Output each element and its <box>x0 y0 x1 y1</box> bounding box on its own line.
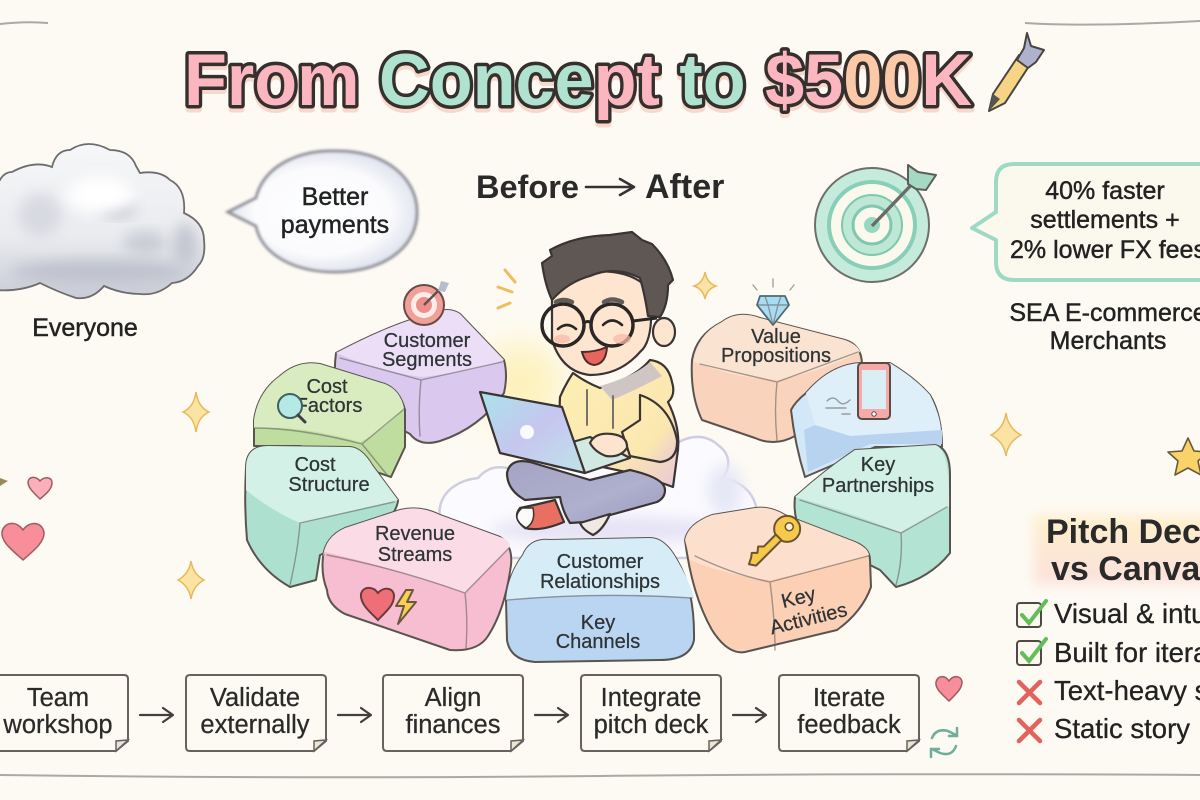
character: boy with laptop on cloud cushion <box>480 232 678 535</box>
glasses <box>542 304 584 346</box>
hair <box>542 232 673 317</box>
step: Validate externally <box>186 675 326 751</box>
step: Align finances <box>383 675 523 751</box>
block: Customer Relationships and Key Channels: Channels <box>556 631 640 653</box>
business model canvas blocks <box>245 279 950 662</box>
arrow <box>733 708 766 722</box>
callout: 40% faster settlements: 40% faster <box>1045 177 1165 205</box>
block: Customer Segments: Customer <box>384 330 471 352</box>
block: Customer Relationships and Key Channels: Relationships <box>540 571 660 593</box>
icon: gold key <box>741 510 806 575</box>
icon: target with dart <box>815 165 936 282</box>
block: Customer Relationships and Key Channels: Customer <box>557 551 644 573</box>
block: Value Propositions: Propositions <box>721 345 831 367</box>
shoe left <box>517 500 564 529</box>
block: Key Partnerships: Partnerships <box>822 475 934 497</box>
star <box>1168 438 1200 475</box>
block: Cost Structure: Cost <box>294 454 336 476</box>
heading: Before to After: Before <box>476 169 579 205</box>
hoodie strings <box>587 390 613 428</box>
panel: Pitch Deck vs Canvas <box>1017 513 1200 744</box>
eyes <box>558 320 622 329</box>
cheeks <box>554 334 570 344</box>
icon: heart <box>936 677 962 701</box>
block: Cost Structure: Structure <box>288 474 370 496</box>
decorative sparkles and hearts <box>0 272 1200 599</box>
glow behind laptop <box>478 343 562 427</box>
step: Integrate pitch deck: pitch deck <box>594 711 709 739</box>
block: Key Activities: Activities <box>768 599 849 639</box>
icon: magnifier <box>278 394 305 422</box>
block: Customer Segments <box>335 310 506 443</box>
heading: Before to After <box>476 168 724 206</box>
cushion cloud <box>439 437 757 558</box>
mouth <box>582 347 607 365</box>
block: phone <box>791 363 942 477</box>
step: Iterate feedback <box>779 675 919 751</box>
step: Team workshop: workshop <box>2 711 113 739</box>
sparkle <box>991 413 1021 456</box>
icon: small target on Customer Segments <box>404 281 449 325</box>
icon: diamond <box>753 279 794 325</box>
heart <box>28 477 52 499</box>
icon: heart and lightning bolt <box>361 588 416 624</box>
speech bubble: Better payments: Better <box>302 183 368 211</box>
icon: grey cloud <box>0 144 204 298</box>
step: Team workshop: Team <box>27 684 89 712</box>
block: Customer Segments: Segments <box>382 349 472 371</box>
cross item: Static story <box>1054 713 1190 744</box>
process flow <box>0 675 962 757</box>
sparkle <box>694 272 716 299</box>
block: Revenue Streams: Streams <box>378 544 452 566</box>
block: Revenue Streams <box>322 508 511 650</box>
hood lining <box>600 362 662 400</box>
sparkle <box>183 392 209 432</box>
block: Key Partnerships <box>795 445 950 587</box>
hoodie <box>560 360 678 487</box>
panel: after, specific target <box>815 164 1200 355</box>
leaf <box>0 478 8 486</box>
icon: refresh arrows <box>931 728 957 757</box>
step: Align finances: Align <box>425 684 481 712</box>
block: Key Activities: Key <box>779 583 818 613</box>
callout: 40% faster settlements <box>972 164 1200 280</box>
highlight <box>1034 516 1200 584</box>
step: Validate externally: externally <box>200 711 310 739</box>
block: Cost Structure <box>245 446 398 587</box>
step: Iterate feedback: Iterate <box>813 684 885 712</box>
label: SEA E-commerce Merchants: Merchants <box>1050 327 1166 355</box>
block: Customer Relationships and Key Channels <box>506 538 694 662</box>
block: Key Partnerships: Key <box>861 454 895 476</box>
heading <box>1046 513 1200 588</box>
block: Customer Relationships and Key Channels: Key <box>581 612 615 634</box>
label: Everyone: Everyone <box>32 314 138 342</box>
laptop <box>480 392 630 473</box>
arrow <box>535 708 568 722</box>
shoe right <box>580 514 610 535</box>
speech bubble: Better payments <box>228 151 417 272</box>
label: SEA E-commerce Merchants <box>1009 299 1200 355</box>
heart <box>2 523 44 560</box>
callout: 40% faster settlements: settlements + <box>1030 206 1180 234</box>
icon: phone <box>826 363 890 419</box>
block: Revenue Streams: Revenue <box>375 523 455 545</box>
step: Team workshop <box>0 675 128 751</box>
step: Integrate pitch deck: Integrate <box>601 684 701 712</box>
title text: From Concept to $500K <box>184 40 972 121</box>
head <box>542 232 675 375</box>
arrow <box>338 708 371 722</box>
block: Cost Factors <box>254 363 405 477</box>
block: Cost Factors: Factors <box>296 395 362 417</box>
title <box>184 33 1044 121</box>
speech bubble: Better payments: payments <box>281 211 389 239</box>
sparkle <box>178 561 204 599</box>
sparks <box>498 270 515 308</box>
block: Value Propositions: Value <box>751 326 801 348</box>
legs <box>507 461 665 523</box>
block: Value Propositions <box>692 315 862 442</box>
block: Key Activities <box>685 508 871 652</box>
step: Integrate pitch deck <box>581 675 721 751</box>
sleeve and hand <box>590 395 677 462</box>
step: Align finances: finances <box>406 711 500 739</box>
panel: before, vague idea <box>0 144 417 342</box>
step: Validate externally: Validate <box>210 684 300 712</box>
icon: pencil with dart fletching <box>989 33 1044 111</box>
block: Cost Factors: Cost <box>306 376 348 398</box>
arrow <box>140 708 173 722</box>
step: Iterate feedback: feedback <box>797 711 901 739</box>
eyebrows <box>556 300 622 302</box>
heading: Before to After: After <box>645 168 724 206</box>
